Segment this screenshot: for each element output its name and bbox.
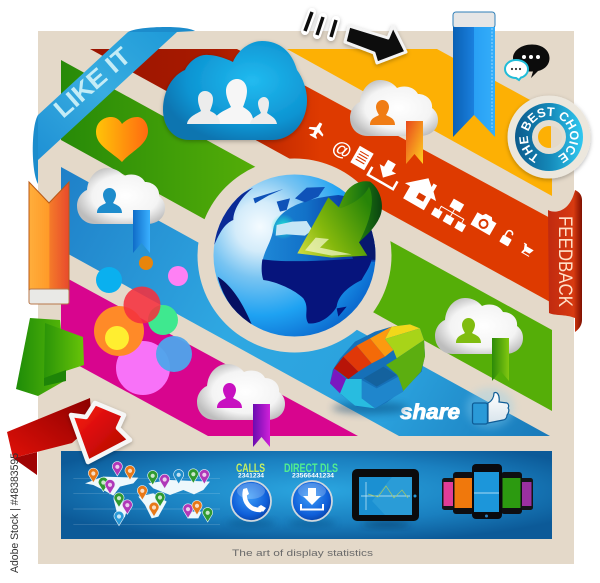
band: red — [90, 49, 552, 303]
icon: plane — [306, 119, 328, 141]
ribbon tag — [253, 404, 270, 447]
icon: thumbs up — [472, 392, 509, 424]
phones row — [442, 464, 533, 519]
icon: people group — [187, 79, 277, 124]
ring around globe — [198, 158, 392, 352]
cloud: blue user — [77, 168, 165, 253]
share with thumbs up — [400, 388, 514, 428]
heading: direct dls: DIRECT DLS — [284, 461, 338, 475]
cloud: orange user — [350, 80, 438, 164]
cloud: green user — [435, 298, 523, 381]
badge: the best choice — [505, 94, 593, 182]
icon: user — [217, 383, 242, 408]
cloud: large blue with people — [163, 41, 307, 140]
bookmark: large blue — [453, 12, 495, 137]
ribbon tag — [492, 338, 509, 381]
number: calls: 2341234 — [238, 472, 264, 480]
tablet with chart — [352, 469, 419, 526]
watermark: stock credit: Adobe Stock | #48383595 — [9, 453, 21, 573]
icon: user — [370, 100, 395, 125]
icon: network — [431, 193, 475, 232]
ribbon: feedback — [548, 190, 582, 332]
band: yellow — [287, 49, 552, 196]
panel: diagonal colour bands — [61, 49, 552, 436]
label: badge text: THE BEST CHOICE — [519, 107, 579, 164]
band: green — [61, 60, 552, 411]
bookmark: orange — [29, 182, 69, 304]
number: direct dls: 23566441234 — [292, 472, 334, 480]
icon: camera — [470, 210, 498, 235]
icon: cart — [519, 243, 535, 257]
calls block — [227, 461, 275, 526]
label: share: share — [400, 401, 460, 424]
caption: The art of display statistics — [232, 548, 373, 559]
panel: blue stats bar — [61, 451, 552, 539]
icon: black arrow with stripes — [305, 12, 406, 63]
icon: speech bubbles — [505, 44, 550, 80]
direct dls block — [284, 461, 338, 526]
icon: download button — [292, 481, 332, 521]
icon: document — [350, 146, 374, 170]
band: blue — [61, 167, 550, 436]
ribbon tag — [406, 121, 423, 164]
cloud: magenta user — [197, 364, 285, 447]
icon: phone button — [231, 481, 271, 521]
bubbles: translucent circles — [94, 256, 192, 395]
icon: at sign: @ — [328, 136, 355, 164]
label: feedback: FEEDBACK — [554, 216, 576, 307]
ribbon tag — [133, 210, 150, 253]
label: like it: LIKE IT — [49, 42, 136, 124]
chart: 3D rainbow donut — [330, 324, 425, 414]
ribbon: like it — [33, 27, 195, 184]
icons: white row on red band — [306, 119, 535, 257]
icon: download tray — [368, 155, 404, 189]
icon: heart — [96, 117, 148, 162]
globe with green arrow — [213, 174, 382, 336]
icon: green arrow — [297, 181, 382, 258]
heading: calls: CALLS — [236, 461, 265, 475]
icon: user — [97, 188, 122, 213]
band: magenta — [61, 275, 358, 436]
icon: house — [398, 169, 444, 213]
arrow: red tag with ribbon — [7, 398, 130, 475]
ribbon: green fold — [16, 318, 84, 396]
icon: padlock — [499, 229, 515, 247]
icon: user — [456, 318, 481, 343]
chart: world map with pins — [73, 462, 220, 526]
